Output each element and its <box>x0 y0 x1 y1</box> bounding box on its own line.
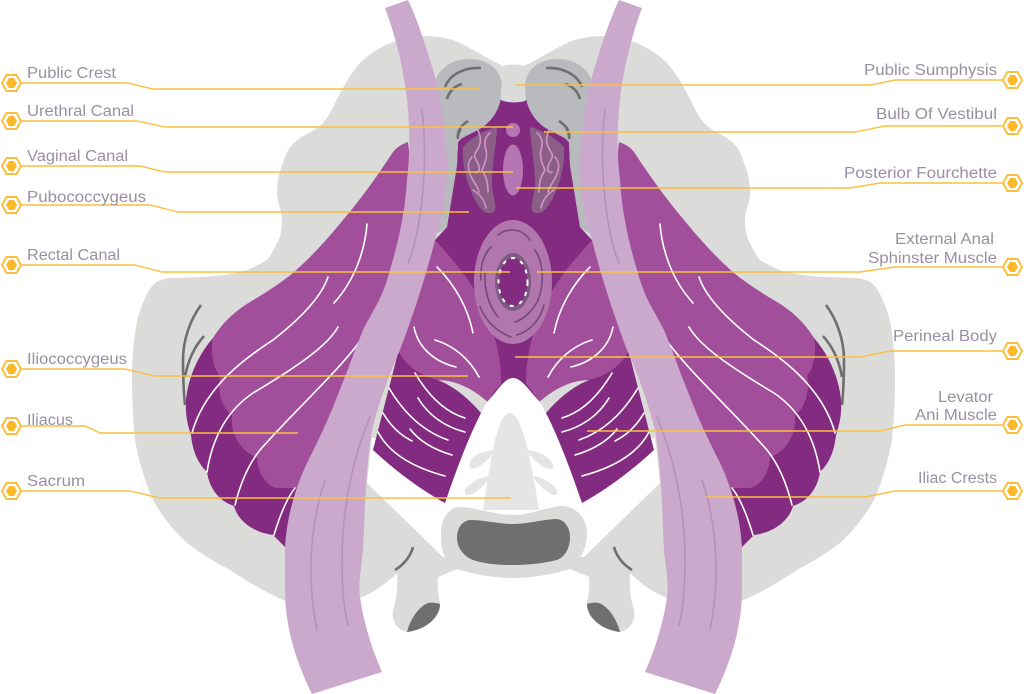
vaginal canal <box>503 144 523 196</box>
gray wing right <box>539 380 589 413</box>
callout: Sacrum <box>2 473 511 499</box>
pubic bone arcs left <box>445 68 481 139</box>
vestibular bulb right <box>530 127 564 213</box>
pelvis silhouette left <box>132 36 514 604</box>
callout: External Anal Sphinster Muscle: Sphinster Muscle <box>868 250 997 267</box>
callout: Urethral Canal <box>2 103 513 129</box>
callout: Pubococcygeus <box>2 189 469 213</box>
callout: Posterior Fourchette: Posterior Fourchette <box>844 165 997 182</box>
white pelvic opening <box>367 438 660 557</box>
iliopsoas band right <box>580 0 742 694</box>
callout: Iliococcygeus: Iliococcygeus <box>27 351 127 368</box>
ischial tip left <box>407 603 440 632</box>
band shading left <box>311 110 424 630</box>
anal sphincter <box>474 220 552 344</box>
callout: External Anal Sphinster Muscle: External Anal <box>895 231 994 248</box>
sacrum ring <box>441 506 587 578</box>
bulb veins left <box>468 128 490 208</box>
callout: Iliococcygeus <box>2 351 468 377</box>
callout: Urethral Canal: Urethral Canal <box>27 103 134 120</box>
pelvis silhouette right <box>513 36 895 604</box>
callout: External Anal Sphinster Muscle <box>537 231 1022 275</box>
urethral canal <box>506 123 520 137</box>
ischial leg right <box>570 560 634 632</box>
callout: Public Sumphysis: Public Sumphysis <box>864 62 997 79</box>
callout: Vaginal Canal: Vaginal Canal <box>27 148 128 165</box>
ischial tip right <box>587 603 620 632</box>
band shading right <box>603 110 716 630</box>
pubic symphysis <box>501 64 526 102</box>
central levator dark muscle <box>373 100 654 503</box>
iliacus dark muscle right <box>697 330 841 549</box>
small arc left <box>395 547 413 570</box>
callout: Vaginal Canal <box>2 148 513 174</box>
callout: Perineal Body <box>515 328 1022 359</box>
iliacus light muscle right <box>607 142 815 488</box>
callout: Public Crest <box>2 65 480 91</box>
central white arch <box>445 378 582 503</box>
callout: Iliacus <box>2 412 298 434</box>
callout: Bulb Of Vestibul: Bulb Of Vestibul <box>876 106 997 123</box>
callout: Rectal Canal <box>2 247 510 273</box>
callout: Public Sumphysis <box>516 62 1022 88</box>
vestibular bulb left <box>463 127 497 213</box>
bulb veins right <box>537 128 559 208</box>
levator lower lobe right <box>526 240 629 402</box>
sacrum spine <box>465 413 557 510</box>
callout: Perineal Body: Perineal Body <box>893 328 997 345</box>
iliac outer arcs right <box>823 305 844 405</box>
callout: Pubococcygeus: Pubococcygeus <box>27 189 146 206</box>
levator fibres right <box>548 267 649 476</box>
iliacus dark muscle left <box>186 330 330 549</box>
pubic bone right <box>525 59 595 235</box>
callout: Public Crest: Public Crest <box>27 65 117 82</box>
iliacus muscle fibres right <box>660 224 835 535</box>
gray wing left <box>438 380 488 413</box>
iliopsoas band left <box>285 0 447 694</box>
callout: Sacrum: Sacrum <box>27 473 85 490</box>
callout: Levator Ani Muscle: Levator <box>938 389 993 406</box>
pubic bone arcs right <box>546 68 582 139</box>
iliacus light muscle left <box>212 142 420 488</box>
small arc right <box>614 547 632 570</box>
iliacus muscle fibres left <box>192 224 367 535</box>
callout: Posterior Fourchette <box>516 165 1022 191</box>
callout: Rectal Canal: Rectal Canal <box>27 247 120 264</box>
coccyx opening <box>457 519 570 565</box>
levator fibres left <box>378 267 479 476</box>
pubic bone left <box>432 59 502 235</box>
callout: Iliac Crests <box>705 470 1022 499</box>
levator lower lobe left <box>398 240 501 402</box>
callout: Levator Ani Muscle: Ani Muscle <box>915 407 997 424</box>
ischial leg left <box>393 560 457 632</box>
callout: Bulb Of Vestibul <box>544 106 1022 134</box>
callout: Levator Ani Muscle <box>587 389 1022 433</box>
callout: Iliac Crests: Iliac Crests <box>918 470 997 487</box>
iliac outer arcs left <box>183 305 204 405</box>
callout: Iliacus: Iliacus <box>27 412 73 429</box>
